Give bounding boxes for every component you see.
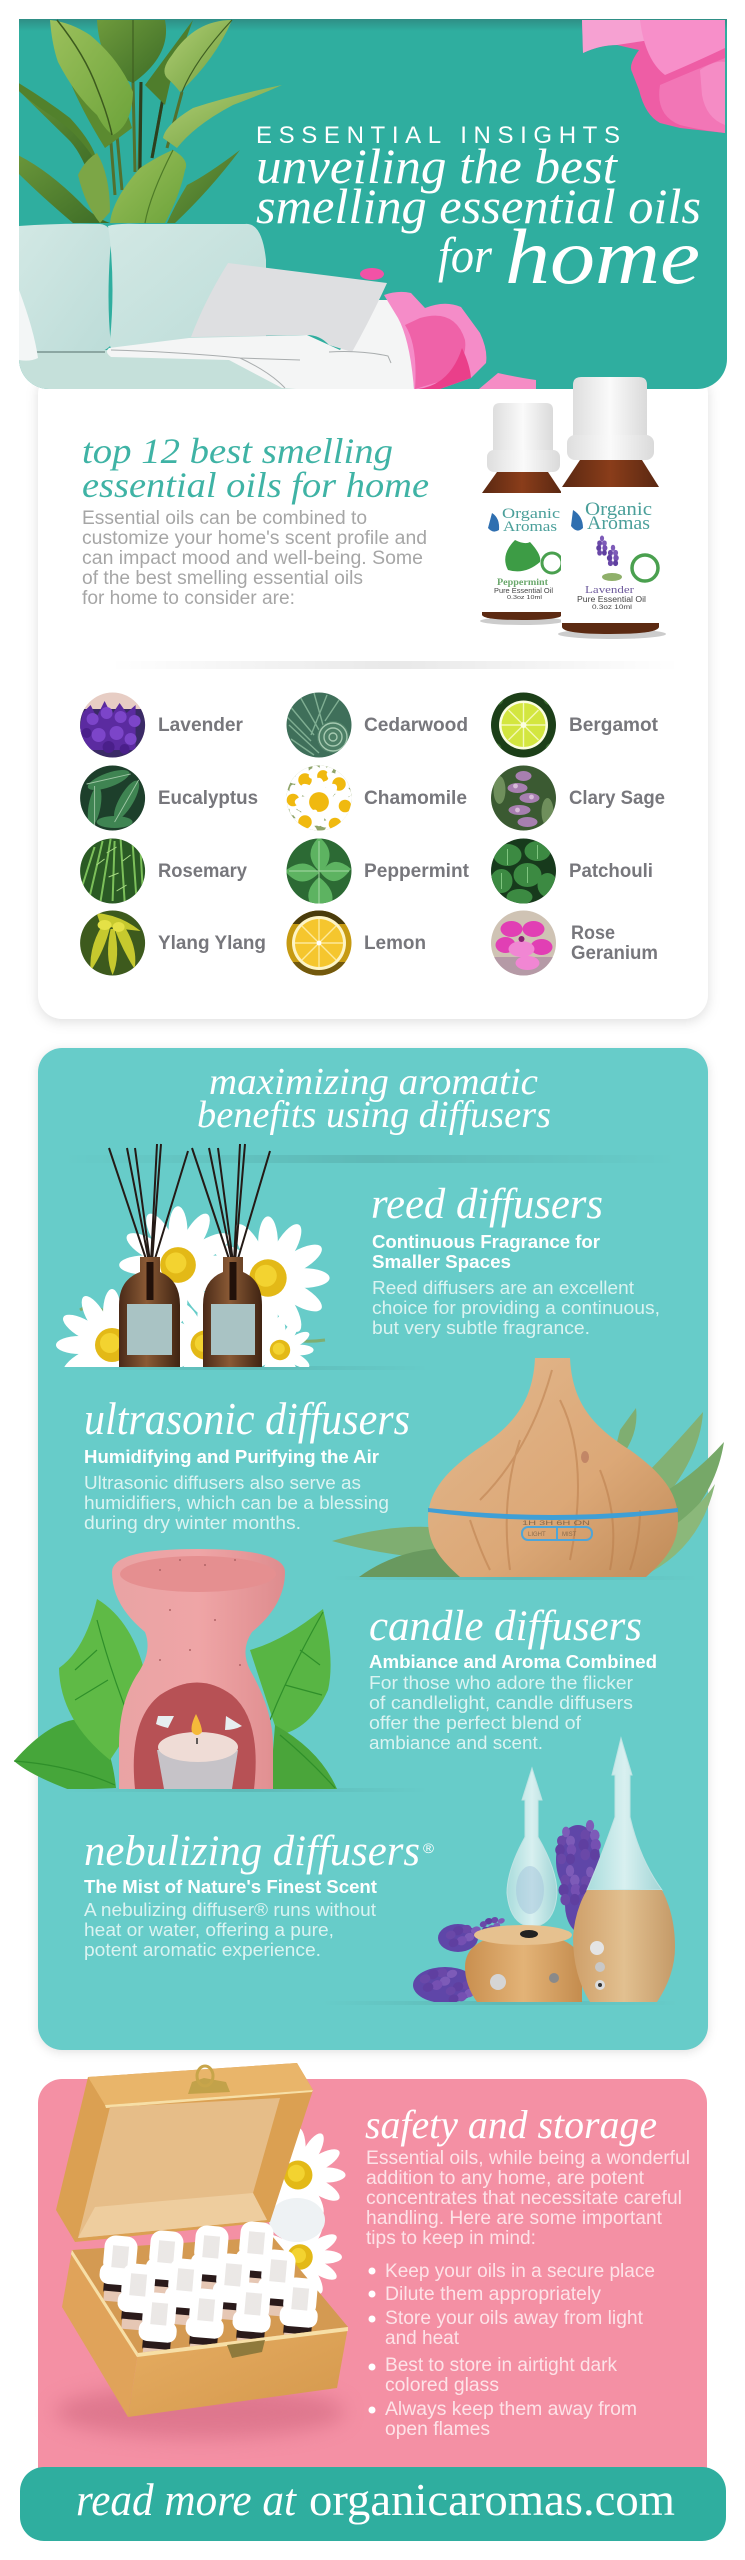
reed diffuser text: Smaller Spaces: [372, 1252, 511, 1272]
safety tips list: Best to store in airtight dark: [385, 2355, 617, 2376]
hero title: home: [505, 213, 700, 300]
section title: maximizing aromatic: [209, 1061, 538, 1103]
reed diffuser text: Reed diffusers are an excellent: [372, 1278, 634, 1298]
nebulizing diffuser text: ®: [423, 1840, 435, 1856]
footer banner: [20, 2467, 726, 2541]
item: Ylang Ylang: [80, 910, 266, 976]
intro paragraph: can impact mood and well-being. Some: [82, 548, 423, 569]
safety heading: safety and storage: [365, 2102, 657, 2147]
reed diffuser text: [371, 1181, 660, 1338]
wooden box with oils: [55, 2063, 348, 2438]
hero title: smelling essential oils: [256, 178, 701, 234]
oil list: [76, 692, 665, 977]
nebulizing diffuser text: potent aromatic experience.: [84, 1940, 321, 1960]
safety tips list: [368, 2261, 655, 2440]
item: Lavender: [76, 692, 244, 759]
item: Rosemary: [80, 838, 247, 904]
item: Rose Geranium: [490, 910, 658, 977]
footer text: [76, 2475, 675, 2525]
ultrasonic diffuser image: 1H 3H 6H ON: [522, 1521, 590, 1527]
section title: [197, 1061, 551, 1136]
safety tips list: Dilute them appropriately: [385, 2284, 602, 2305]
item: Bergamot: Bergamot: [569, 715, 659, 736]
nebulizing diffuser image: [413, 1738, 675, 2006]
safety tips list: Always keep them away from: [385, 2399, 637, 2420]
safety tips list: and heat: [385, 2328, 460, 2349]
safety tips list: Store your oils away from light: [385, 2308, 644, 2329]
candle diffuser text: ambiance and scent.: [369, 1733, 543, 1753]
reed diffuser text: Continuous Fragrance for: [372, 1232, 600, 1252]
ultrasonic diffuser image: LIGHT: [528, 1532, 546, 1538]
safety paragraph: handling. Here are some important: [366, 2208, 663, 2229]
intro paragraph: for home to consider are:: [82, 588, 295, 609]
nebulizing diffuser text: [84, 1828, 435, 1960]
safety tips list: Keep your oils in a secure place: [385, 2261, 655, 2282]
nebulizing diffuser text: The Mist of Nature's Finest Scent: [84, 1877, 377, 1897]
intro paragraph: of the best smelling essential oils: [82, 568, 363, 589]
plant: [0, 20, 282, 223]
reed diffuser text: but very subtle fragrance.: [372, 1318, 590, 1338]
item: Rosemary: Rosemary: [158, 861, 247, 882]
bottle: lavender: Aromas: [587, 513, 650, 534]
safety paragraph: concentrates that necessitate careful: [366, 2188, 682, 2209]
bottle: peppermint: 0.3oz 10ml: [507, 595, 542, 601]
nebulizing diffuser text: A nebulizing diffuser® runs without: [84, 1900, 376, 1920]
ultrasonic diffuser text: Ultrasonic diffusers also serve as: [84, 1473, 361, 1493]
bottle: peppermint: Pure Essential Oil: [494, 588, 553, 595]
hero title: for: [438, 227, 492, 283]
item: Patchouli: [490, 838, 653, 905]
item: Peppermint: Peppermint: [364, 861, 470, 882]
divider shadow: [110, 661, 680, 669]
item: Rose Geranium: Geranium: [571, 943, 658, 964]
sofa: [19, 224, 414, 389]
candle diffuser text: offer the perfect blend of: [369, 1713, 582, 1733]
nebulizing diffuser text: nebulizing diffusers: [84, 1828, 420, 1875]
item: Clary Sage: [490, 765, 665, 831]
panel: white intro card: [38, 370, 708, 1019]
reed diffuser text: reed diffusers: [371, 1181, 603, 1228]
panel: hero banner: [0, 19, 727, 389]
footer text: read more at: [76, 2475, 297, 2525]
footer text: organicaromas.com: [309, 2475, 675, 2525]
candle diffuser text: of candlelight, candle diffusers: [369, 1693, 633, 1713]
heading: top 12: [82, 431, 429, 505]
ultrasonic diffuser text: during dry winter months.: [84, 1513, 301, 1533]
panel: safety and storage: [38, 2063, 707, 2490]
flowers: top right: [582, 20, 725, 133]
ultrasonic diffuser text: ultrasonic diffusers: [84, 1394, 410, 1444]
intro paragraph: Essential oils can be combined to: [82, 508, 367, 529]
candle diffuser text: Ambiance and Aroma Combined: [369, 1652, 657, 1672]
reed diffuser text: choice for providing a continuous,: [372, 1298, 660, 1318]
bottle: lavender: 0.3oz 10ml: [592, 605, 632, 611]
item: Eucalyptus: [80, 765, 258, 831]
item: Cedarwood: [286, 692, 468, 758]
safety paragraph: [366, 2148, 690, 2249]
item: Chamomile: Chamomile: [364, 788, 467, 809]
ultrasonic diffuser image: MIST: [562, 1532, 577, 1538]
item: Eucalyptus: Eucalyptus: [158, 788, 258, 809]
bottle: peppermint: Organic: [502, 506, 560, 522]
divider shadow: [60, 1155, 680, 1163]
safety paragraph: addition to any home, are potent: [366, 2168, 645, 2189]
ultrasonic diffuser text: [84, 1394, 410, 1533]
item: Peppermint: [285, 837, 470, 905]
ultrasonic diffuser image: [332, 1358, 724, 1577]
item: Clary Sage: Clary Sage: [569, 788, 665, 809]
section title: benefits using diffusers: [197, 1094, 551, 1136]
ultrasonic diffuser text: humidifiers, which can be a blessing: [84, 1493, 389, 1513]
bottle: lavender: Organic: [585, 499, 652, 520]
eyebrow: ESSENTIAL INSIGHTS: [256, 122, 620, 149]
candle diffuser text: candle diffusers: [369, 1603, 642, 1650]
bottle: lavender: [558, 377, 666, 639]
safety paragraph: tips to keep in mind:: [366, 2228, 536, 2249]
item: Patchouli: Patchouli: [569, 861, 653, 882]
item: Rose Geranium: Rose: [571, 923, 615, 944]
candle diffuser image: [14, 1549, 337, 1790]
item: Bergamot: [490, 692, 659, 758]
item: Cedarwood: Cedarwood: [364, 715, 468, 736]
item: Lemon: Lemon: [364, 933, 426, 954]
intro paragraph: customize your home's scent profile and: [82, 528, 427, 549]
bottle: lavender: Lavender: [585, 584, 634, 596]
bottle: peppermint: Peppermint: [497, 577, 548, 587]
bottle: lavender: Pure Essential Oil: [577, 595, 646, 604]
reed diffuser image: [56, 1144, 330, 1367]
item: Chamomile: [286, 766, 466, 830]
heading: top 12: top 12 best smelling: [82, 431, 393, 471]
item: Lemon: [286, 910, 426, 976]
candle diffuser text: [369, 1603, 657, 1753]
item: Ylang Ylang: Ylang Ylang: [158, 933, 266, 954]
item: Lavender: Lavender: [158, 715, 244, 736]
safety tips list: open flames: [385, 2419, 490, 2440]
intro paragraph: [82, 508, 427, 609]
product: oil bottles: [480, 377, 666, 639]
bottle: peppermint: [480, 403, 564, 625]
candle diffuser text: For those who adore the flicker: [369, 1673, 633, 1693]
bottle: peppermint: Aromas: [503, 519, 557, 535]
safety paragraph: Essential oils, while being a wonderful: [366, 2148, 690, 2169]
ultrasonic diffuser text: Humidifying and Purifying the Air: [84, 1447, 379, 1467]
panel: diffusers: [14, 1048, 724, 2050]
hero title: unveiling the best: [256, 138, 618, 194]
flowers: bottom: [360, 268, 536, 389]
safety tips list: colored glass: [385, 2375, 499, 2396]
heading: top 12: essential oils for home: [82, 465, 429, 505]
nebulizing diffuser text: heat or water, offering a pure,: [84, 1920, 334, 1940]
hero title: [256, 138, 701, 300]
